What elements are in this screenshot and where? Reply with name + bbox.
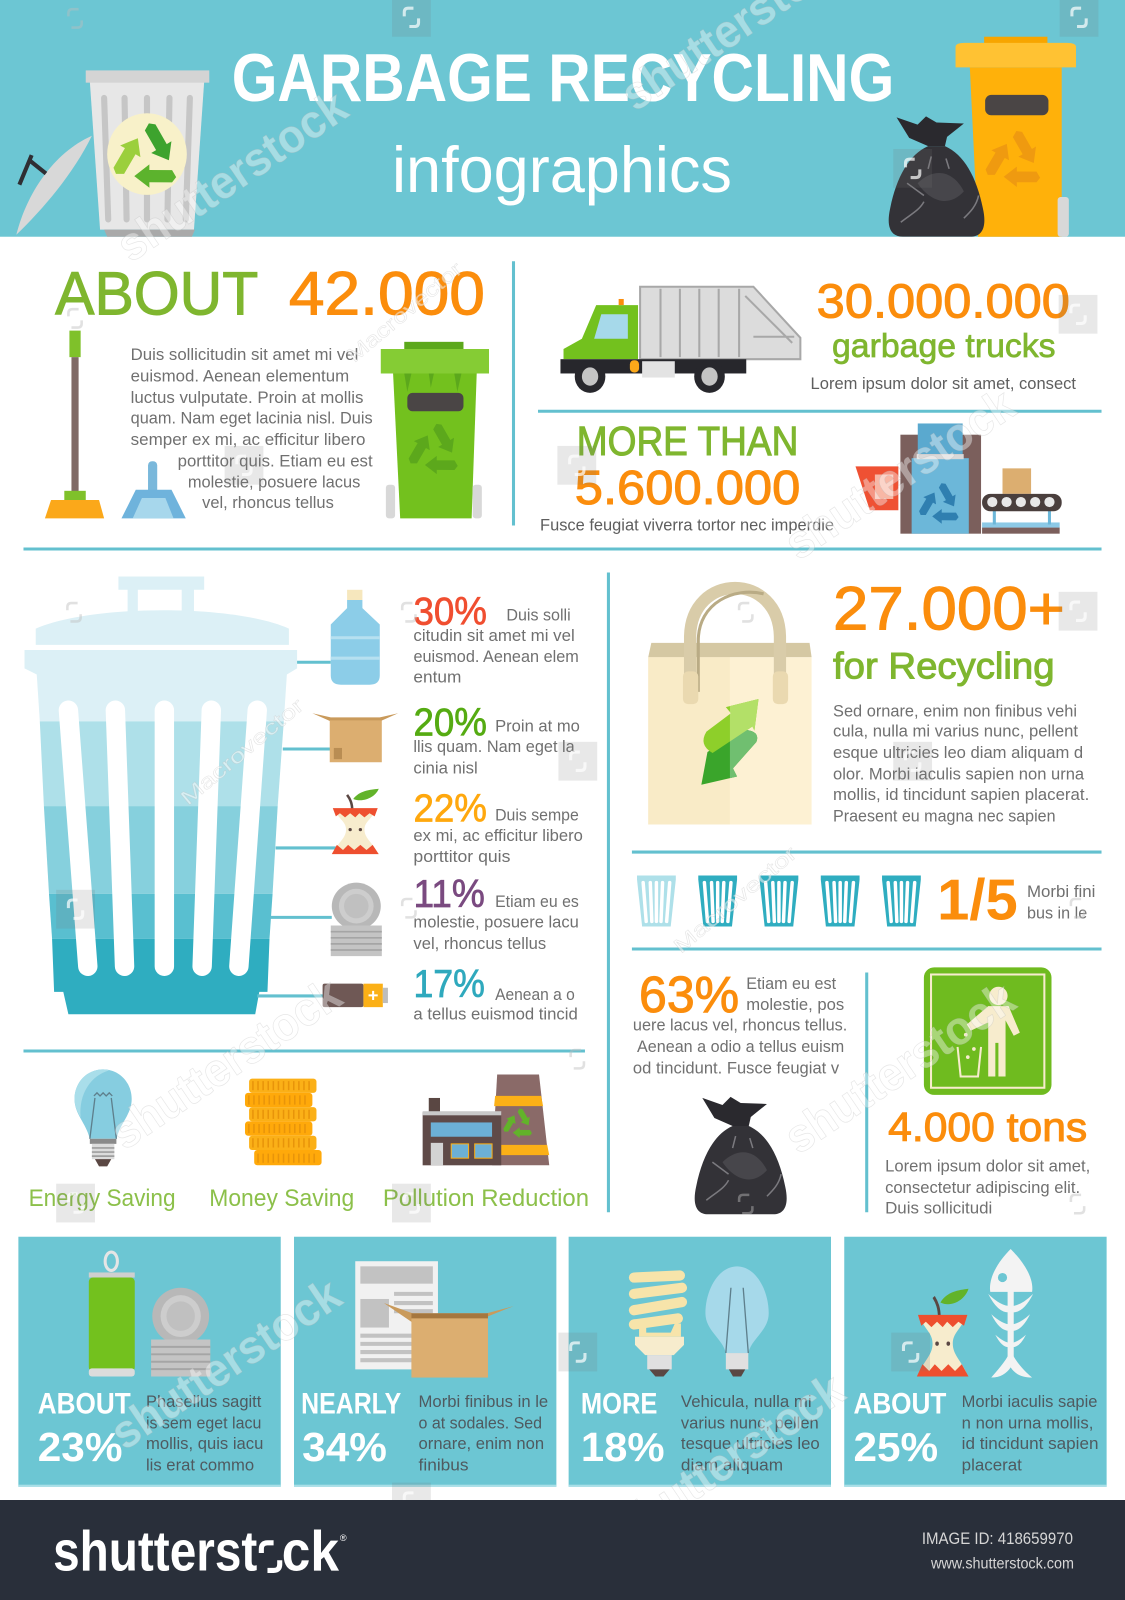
text block [833, 702, 1089, 825]
watermarks: shutterstock [107, 80, 357, 272]
icon: newspaper and box [355, 1261, 513, 1378]
item: 30 percent: citudin sit amet mi vel [413, 627, 575, 645]
label: garbage trucks [832, 328, 1056, 365]
title [232, 41, 894, 206]
text block: Phasellus sagitt [146, 1393, 262, 1411]
icon: light bulb [75, 1069, 132, 1166]
text block: Sed ornare, enim non finibus vehi [833, 702, 1077, 720]
connector lines [257, 662, 337, 996]
item: 20 percent: Proin at mo [495, 718, 580, 736]
stat: 34% [302, 1424, 387, 1470]
caption: bus in le [1027, 904, 1087, 922]
text block: Aenean a odio a tellus euism [637, 1038, 844, 1056]
subtitle: infographics [392, 133, 732, 206]
text block: Praesent eu magna nec sapien [833, 807, 1056, 825]
item: 30 percent: Duis solli [506, 606, 571, 624]
caption [1027, 883, 1095, 922]
text block: diam aliquam [681, 1456, 783, 1474]
text block: ornare, enim non [419, 1435, 544, 1453]
card: about 23 percent [18, 1237, 281, 1487]
panel: garbage trucks [560, 275, 1076, 393]
item: 22 percent: porttitor quis [413, 848, 510, 866]
text block: molestie, pos [746, 996, 844, 1014]
text block [419, 1393, 548, 1474]
item: 17 percent: a tellus euismod tincid [413, 1005, 578, 1023]
icon: apple core and fish bone [917, 1249, 1033, 1378]
icon: coin stack [245, 1079, 322, 1165]
item: 20 percent: cinia nisl [413, 759, 478, 777]
card: more 18 percent [569, 1237, 831, 1487]
footer bar [0, 1500, 1125, 1600]
item: 17 percent: 17% [413, 963, 485, 1006]
big number: 30.000.000 [817, 275, 1070, 328]
icon: recycling machine [855, 423, 1062, 534]
chart: trash can filled by material share [25, 577, 337, 1014]
slots [68, 710, 257, 966]
text block: Morbi iaculis sapie [962, 1393, 1097, 1411]
watermarks: shutterstock [604, 1362, 854, 1554]
item: 11 percent: vel, rhoncus tellus [413, 935, 546, 953]
item: 20 percent [413, 702, 580, 777]
stacked bands [37, 674, 287, 1014]
text block: consectetur adipiscing elit. [885, 1179, 1080, 1197]
icon: green wheelie bin [381, 342, 489, 518]
text block: Vehicula, nulla mi [681, 1393, 812, 1411]
item: 30 percent: entum [413, 669, 461, 687]
text block: Duis sollicitudin sit amet mi vel [131, 346, 358, 364]
label: for Recycling [833, 646, 1055, 687]
text block: semper ex mi, ac efficitur libero [131, 431, 365, 449]
card: about 25 percent [844, 1237, 1107, 1487]
icon: energy saving bulb and light bulb [634, 1266, 769, 1377]
text block [131, 346, 373, 512]
labels: Money Saving [209, 1185, 354, 1212]
stat [853, 1387, 946, 1470]
text block: Morbi finibus in le [419, 1393, 548, 1411]
labels: Pollution Reduction [383, 1185, 589, 1212]
text block: Etiam eu est [746, 975, 837, 993]
item: 30 percent [413, 590, 579, 687]
panel: 63 percent [633, 966, 847, 1214]
icon: grey trash can with recycle badge [16, 70, 209, 237]
icon: factory [423, 1074, 549, 1165]
stat: ABOUT [853, 1387, 946, 1420]
item: 30 percent: 30% [413, 590, 487, 633]
watermarks: Macrovector [670, 842, 802, 958]
text block: mollis, quis iacu [146, 1435, 263, 1453]
caption: Fusce feugiat viverra tortor nec imperdie [540, 517, 834, 535]
item: 22 percent: Duis sempe [495, 806, 579, 824]
watermarks: shutterstock [775, 971, 1025, 1163]
icon row: five bins [637, 876, 921, 927]
image id: www.shutterstock.com [930, 1555, 1074, 1572]
image id: IMAGE ID: 418659970 [922, 1530, 1073, 1548]
text block [962, 1393, 1098, 1474]
item: 11 percent: Etiam eu es [495, 893, 579, 911]
stat: MORE [581, 1387, 657, 1420]
logo: ® [340, 1533, 347, 1543]
lid [25, 577, 297, 674]
item: 11 percent: molestie, posuere lacu [413, 914, 579, 932]
text block: mollis, id tincidunt sapien placerat. [833, 786, 1089, 804]
icon: dustpan [121, 461, 186, 518]
panel: 1/5 bins [637, 868, 1095, 932]
watermarks: shutterstock [101, 1267, 351, 1459]
item: 11 percent: 11% [413, 873, 485, 916]
item: 20 percent: 20% [413, 702, 487, 745]
item: 17 percent: Aenean a o [495, 986, 575, 1004]
item: 22 percent: ex mi, ac efficitur libero [413, 827, 583, 845]
text block [885, 1157, 1090, 1217]
text block: molestie, posuere lacus [188, 474, 360, 492]
stat [38, 1387, 131, 1470]
big number: 27.000+ [833, 575, 1065, 643]
text block: vel, rhoncus tellus [202, 494, 334, 512]
text block: luctus vulputate. Proin at mollis [131, 389, 363, 407]
text block [633, 975, 847, 1077]
panel: savings [29, 1069, 589, 1212]
labels: Energy Saving [29, 1185, 176, 1212]
logo: ck [282, 1519, 340, 1582]
watermarks: shutterstock [101, 967, 351, 1159]
caption: Lorem ipsum dolor sit amet, consect [811, 375, 1076, 393]
text block: od tincidunt. Fusce feugiat v [633, 1059, 840, 1077]
text block: quam. Nam eget lacinia nisl. Duis [131, 409, 373, 427]
item: 11 percent [413, 873, 579, 953]
big number: 4.000 tons [888, 1104, 1087, 1150]
caption: Morbi fini [1027, 883, 1095, 901]
text block: porttitor quis. Etiam eu est [178, 452, 373, 470]
icon: tin can [331, 883, 382, 956]
item: 30 percent: euismod. Aenean elem [413, 648, 579, 666]
stat [301, 1387, 401, 1470]
heading: 42.000 [289, 259, 485, 327]
text block [146, 1393, 263, 1474]
panel: 4.000 tons [885, 967, 1090, 1217]
text block: is sem eget lacu [146, 1415, 261, 1433]
icon: paper bag [648, 588, 812, 824]
text block: lis erat commo [146, 1456, 254, 1474]
icon: cardboard box [312, 713, 398, 762]
fraction: 1/5 [937, 868, 1018, 932]
heading: MORE THAN [577, 418, 798, 464]
watermarks: Macrovector [177, 695, 309, 810]
text block: Duis sollicitudi [885, 1199, 992, 1217]
icon: water bottle [331, 590, 380, 685]
logo: shutterst [53, 1519, 257, 1582]
stat: 25% [853, 1424, 938, 1470]
watermarks: Macrovector [343, 258, 467, 367]
text block: tesque ultricies leo [681, 1435, 820, 1453]
text block: id tincidunt sapien [962, 1435, 1098, 1453]
text block: finibus [419, 1456, 469, 1474]
panel: 27.000+ for recycling [648, 575, 1089, 825]
stat: ABOUT [38, 1387, 131, 1420]
text block: euismod. Aenean elementum [131, 368, 349, 386]
text block: olor. Morbi iaculis sapien non urna [833, 766, 1085, 784]
item: 22 percent: 22% [413, 787, 487, 830]
text block [681, 1393, 820, 1474]
item: 20 percent: llis quam. Nam eget la [413, 738, 576, 756]
text block: o at sodales. Sed [419, 1415, 542, 1433]
icon: apple core [332, 789, 379, 854]
icon: drink can and tin [89, 1252, 210, 1377]
icon: garbage truck [560, 287, 800, 393]
header band [0, 0, 1125, 237]
text block: cula, nulla mi varius nunc, pellent [833, 723, 1079, 741]
text block: varius nunc, pellen [681, 1415, 819, 1433]
card: nearly 34 percent [294, 1237, 556, 1487]
item: 17 percent [413, 963, 578, 1023]
stat: 23% [38, 1424, 123, 1470]
watermarks: shutterstock [775, 378, 1025, 570]
title: GARBAGE RECYCLING [232, 41, 894, 116]
heading: ABOUT [55, 259, 258, 327]
panel: more than 5.600.000 [540, 418, 1062, 535]
icon: black garbage bag [695, 1097, 787, 1214]
text block: Lorem ipsum dolor sit amet, [885, 1157, 1090, 1175]
icon: yellow wheelie bin with black bag [889, 37, 1076, 237]
text block: uere lacus vel, rhoncus tellus. [633, 1017, 847, 1035]
panel: about 42.000 [45, 259, 489, 518]
icon: battery [323, 984, 388, 1007]
icon: broom [45, 331, 104, 518]
text block: esque ultricies leo diam aliquam d [833, 744, 1083, 762]
stat: 18% [581, 1424, 665, 1470]
big number: 63% [639, 966, 739, 1023]
text block: n non urna mollis, [962, 1415, 1093, 1433]
labels [29, 1185, 589, 1212]
heading [55, 259, 485, 327]
stat [581, 1387, 665, 1470]
text block: placerat [962, 1456, 1022, 1474]
item: 22 percent [413, 787, 583, 866]
stat: NEARLY [301, 1387, 401, 1420]
big number: 5.600.000 [575, 462, 800, 515]
image id [922, 1530, 1074, 1572]
icon: do not litter sign [924, 967, 1051, 1095]
